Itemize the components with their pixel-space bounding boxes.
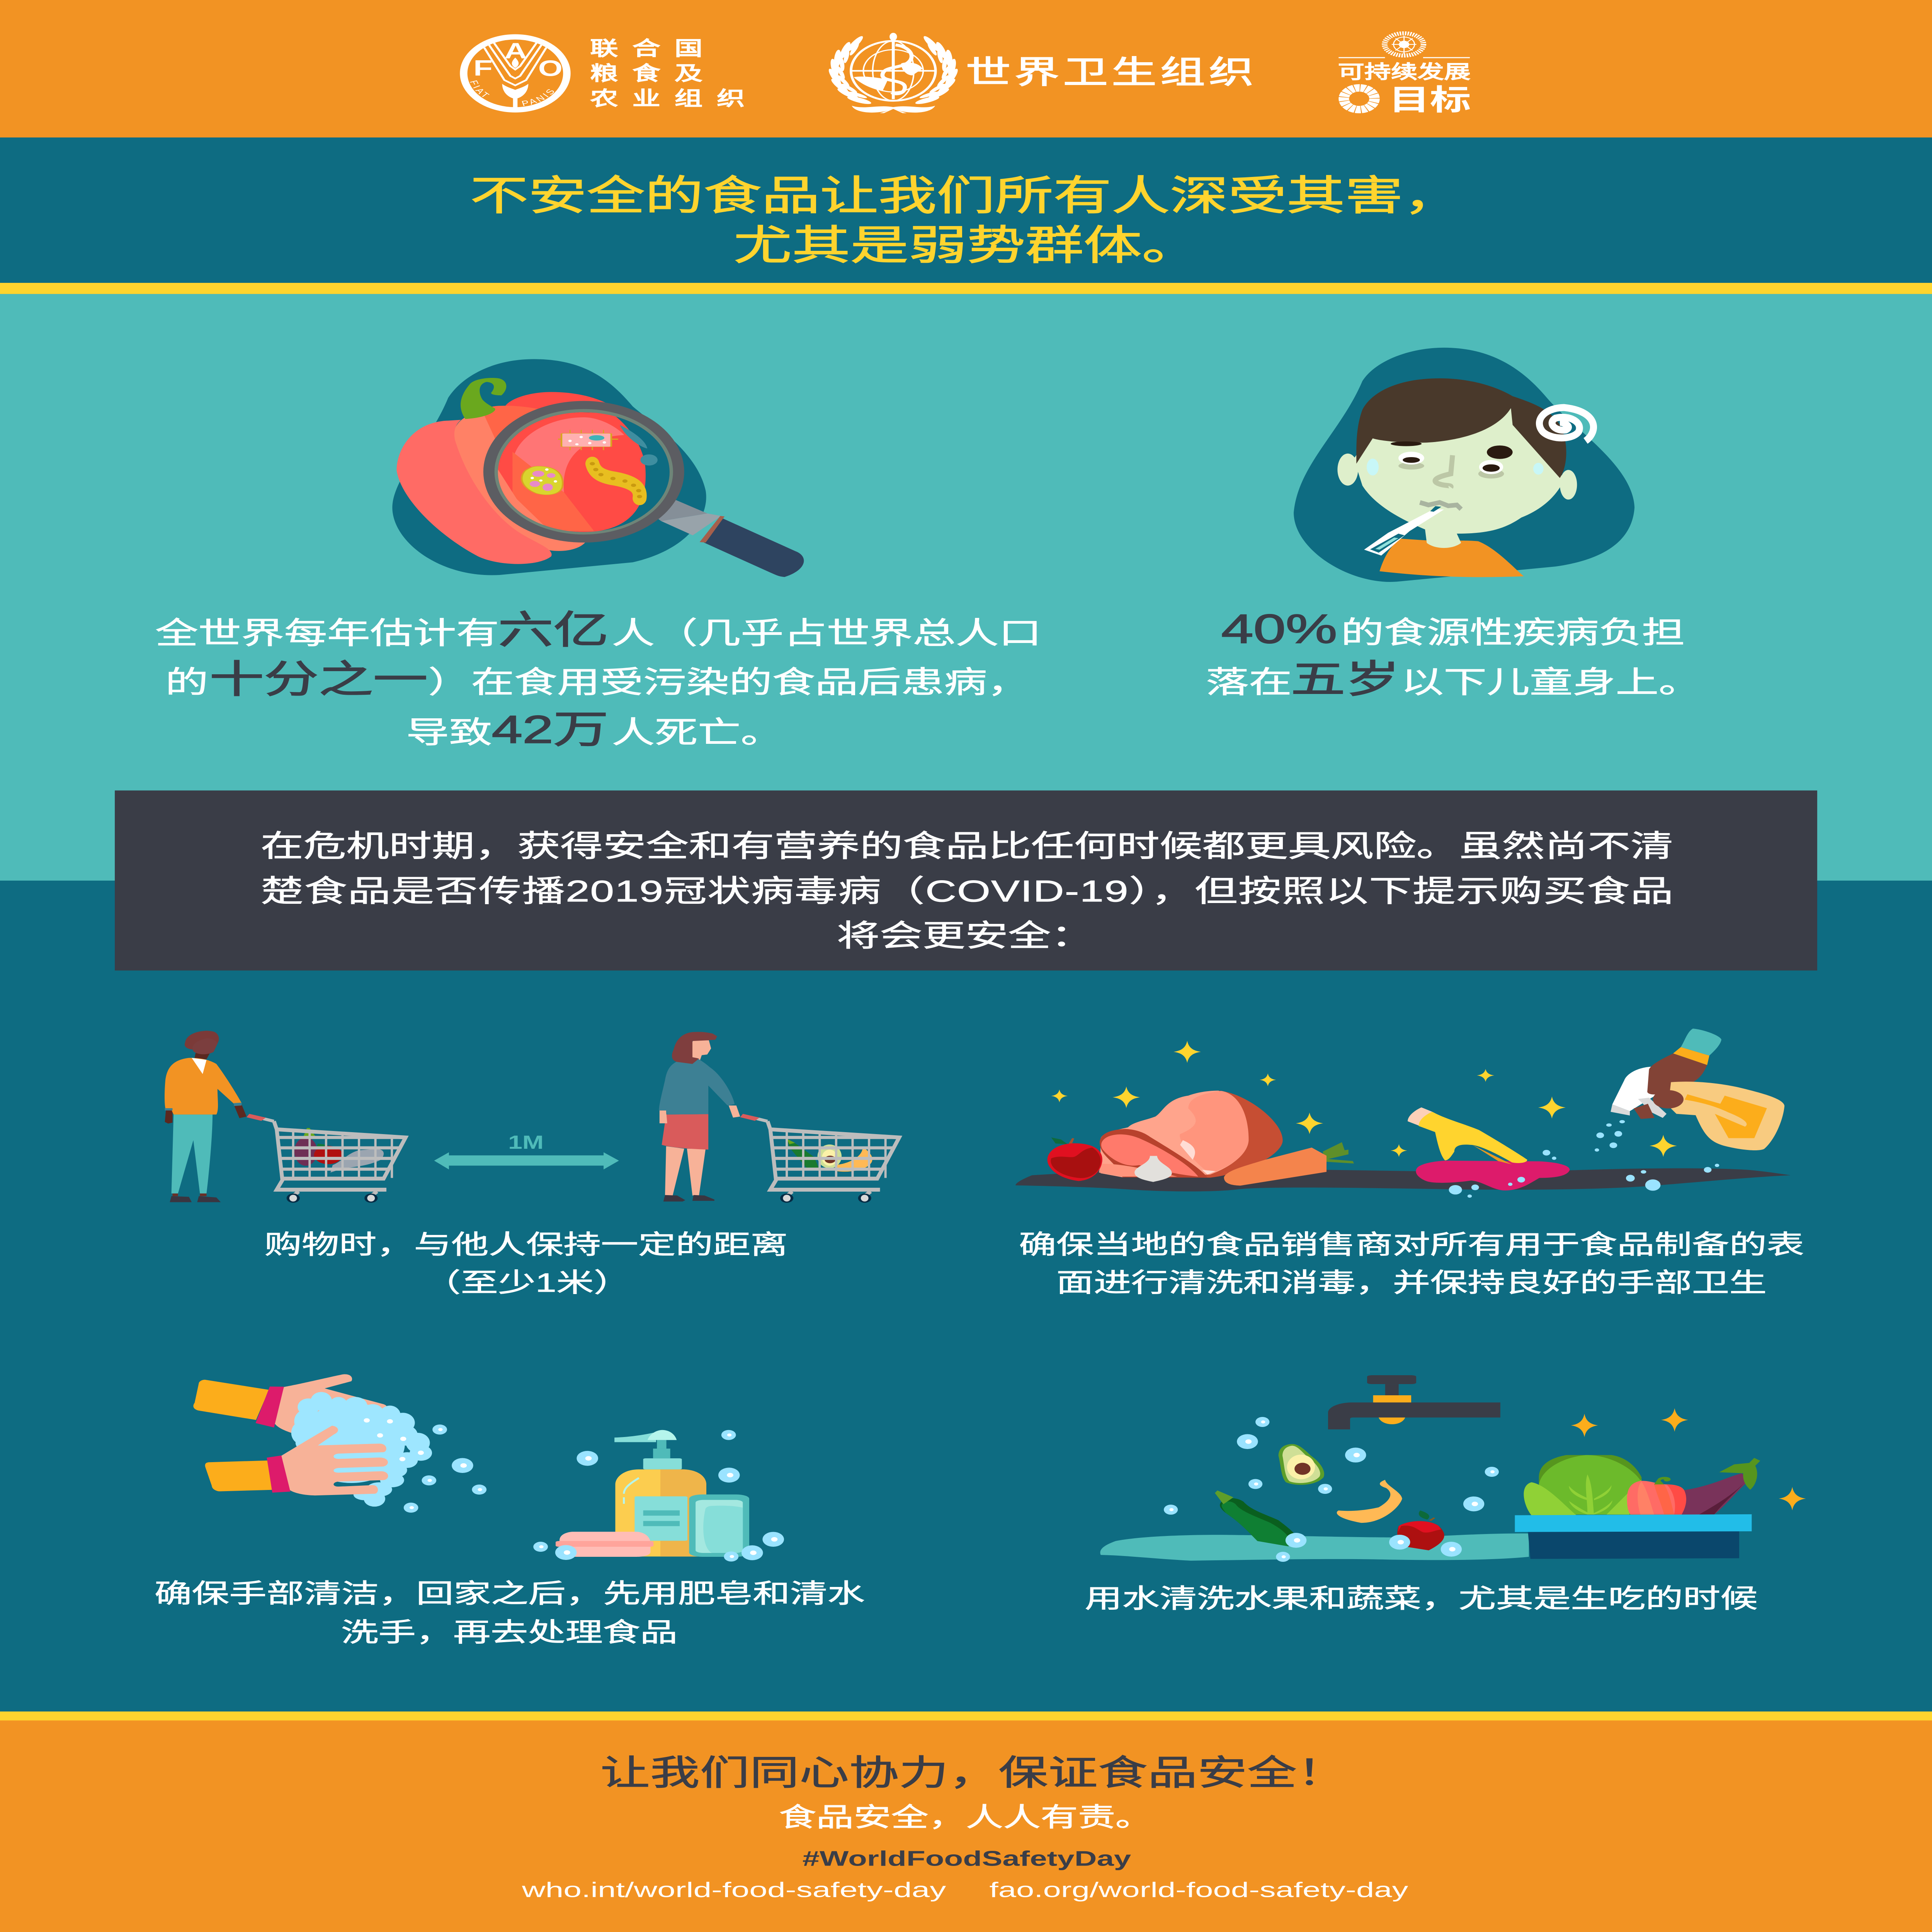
- text block: 40 percent: 的食源性疾病负担: [1341, 616, 1685, 650]
- avocado: [1279, 1444, 1324, 1485]
- website links: who.int/world-food-safety-day: [522, 1878, 946, 1902]
- spray bottle and hand: [1611, 1029, 1784, 1150]
- title: 尤其是弱势群体。: [734, 223, 1200, 269]
- icon: sick child with thermometer: [1294, 348, 1634, 582]
- text block: surfaces tip: 确保当地的食品销售商对所有用于食品制备的表: [1019, 1230, 1804, 1259]
- text block: distance tip: 购物时，与他人保持一定的距离: [264, 1230, 788, 1259]
- text block: 40 percent: 40%: [1221, 606, 1337, 652]
- icon: contaminated pepper under magnifier: [392, 359, 804, 577]
- title: [470, 173, 1461, 269]
- callout: crisis panel: 在危机时期，获得安全和有营养的食品比任何时候都更具风险。虽然尚不清: [260, 830, 1673, 863]
- website links: fao.org/world-food-safety-day: [989, 1878, 1408, 1902]
- yellow rule: [0, 283, 1932, 294]
- sparkles: [1051, 1041, 1677, 1157]
- text block: 600 million: 的: [165, 665, 208, 699]
- cart contents: courgette, avocado, banana: [787, 1139, 872, 1172]
- text block: 600 million: 导致: [406, 716, 492, 750]
- website links: [522, 1878, 1408, 1902]
- text block: distance tip: [264, 1230, 788, 1298]
- SDG text: 可持续发展: [1338, 61, 1471, 82]
- footer band: [0, 1721, 1932, 1932]
- apple: [1048, 1138, 1102, 1181]
- text block: distance tip: （至少1米）: [423, 1268, 631, 1298]
- FAO logo: FIAT: [468, 79, 493, 100]
- footer subheading: 食品安全，人人有责。: [779, 1802, 1153, 1832]
- soap bar: [556, 1532, 653, 1557]
- header band: [0, 0, 1932, 138]
- icon: washing fruit and vegetables under tap: [1100, 1375, 1806, 1562]
- text block: 600 million: 42万: [492, 708, 609, 752]
- water: [1100, 1533, 1529, 1561]
- pepper: [1627, 1477, 1686, 1515]
- basket: [1515, 1514, 1752, 1559]
- cart contents: aubergine, pepper, fish: [294, 1128, 384, 1172]
- text block: washing produce tip: 用水清洗水果和蔬菜，尤其是生吃的时候: [1085, 1583, 1758, 1613]
- garlic: [1134, 1156, 1172, 1182]
- text block: hand washing tip: [155, 1578, 865, 1647]
- text block: surfaces tip: 面进行清洗和消毒，并保持良好的手部卫生: [1056, 1268, 1767, 1298]
- first cart: [247, 1114, 406, 1203]
- WHO name: 世界卫生组织: [966, 54, 1257, 90]
- yellow rule footer: [0, 1711, 1932, 1721]
- dark teal panel: [0, 881, 1932, 1711]
- text block: 600 million: [155, 609, 1042, 752]
- callout: crisis panel: 将会更安全：: [837, 919, 1094, 953]
- lettuce: [1524, 1455, 1643, 1515]
- text block: 600 million: 人（几乎占世界总人口: [612, 616, 1042, 650]
- carrot: [1224, 1142, 1354, 1185]
- soap pump bottle: [614, 1430, 706, 1556]
- UN emblem: [1338, 33, 1470, 58]
- ham: [1099, 1091, 1283, 1178]
- droplets: [1449, 1120, 1719, 1198]
- distance arrow: [434, 1152, 619, 1169]
- text block: hand washing tip: 洗手，再去处理食品: [341, 1617, 677, 1647]
- light teal panel: [0, 294, 1932, 881]
- FAO logo: [464, 37, 567, 110]
- text block: 40 percent: [1206, 606, 1702, 701]
- soap bottle: [689, 1495, 749, 1557]
- FAO logo: F: [473, 55, 493, 80]
- second cart: [740, 1114, 899, 1203]
- FAO name: 农业组织: [590, 88, 759, 110]
- FAO logo: O: [538, 56, 563, 81]
- sparkles: [1571, 1408, 1806, 1510]
- text block: 600 million: 人死亡。: [612, 716, 784, 750]
- footer heading: 让我们同心协力，保证食品安全！: [600, 1753, 1347, 1793]
- apple: [1397, 1510, 1444, 1550]
- woman: [659, 1032, 740, 1202]
- bubbles: [404, 1425, 784, 1561]
- callout: crisis panel: 楚食品是否传播2019冠状病毒病（COVID-19），但按照以下提示购买食品: [260, 874, 1673, 908]
- text block: 600 million: 十分之一: [209, 658, 428, 701]
- text block: 40 percent: 落在: [1206, 665, 1292, 699]
- text block: 40 percent: 五岁: [1291, 658, 1400, 701]
- icon: hand washing with soap: [193, 1374, 784, 1561]
- tap: [1328, 1375, 1500, 1429]
- title: 不安全的食品让我们所有人深受其害，: [470, 173, 1461, 219]
- spill and gloved hand: [1408, 1107, 1570, 1190]
- hashtag: #WorldFoodSafetyDay: [803, 1847, 1131, 1871]
- text block: hand washing tip: 确保手部清洁，回家之后，先用肥皂和清水: [155, 1578, 865, 1608]
- distance label: 1M: [508, 1131, 544, 1153]
- text block: 600 million: 六亿: [498, 609, 609, 652]
- title band: [0, 138, 1932, 283]
- icon: shoppers keeping one metre apart: [165, 1031, 899, 1203]
- WHO emblem: [827, 33, 960, 113]
- text block: 40 percent: 以下儿童身上。: [1401, 665, 1702, 699]
- FAO name: 粮食及: [590, 63, 717, 85]
- callout: crisis panel: [115, 791, 1817, 971]
- SDG wheel: [1344, 88, 1374, 110]
- hands: [193, 1374, 432, 1507]
- text block: 600 million: ）在食用受污染的食品后患病，: [428, 665, 1030, 699]
- bubbles: [1164, 1417, 1499, 1562]
- FAO logo: A: [504, 38, 527, 63]
- FAO name: 联合国: [590, 37, 717, 60]
- FAO logo: PANIS: [520, 86, 558, 108]
- SDG goals word: 目标: [1389, 84, 1471, 116]
- text block: 600 million: 全世界每年估计有: [155, 616, 499, 650]
- FAO name: [590, 37, 759, 110]
- courgette: [1215, 1490, 1296, 1546]
- man: [165, 1031, 247, 1202]
- banana: [1337, 1480, 1402, 1523]
- text block: surfaces tip: [1019, 1230, 1804, 1298]
- aubergine: [1680, 1458, 1760, 1515]
- icon: clean surfaces with food and spray: [1015, 1029, 1791, 1198]
